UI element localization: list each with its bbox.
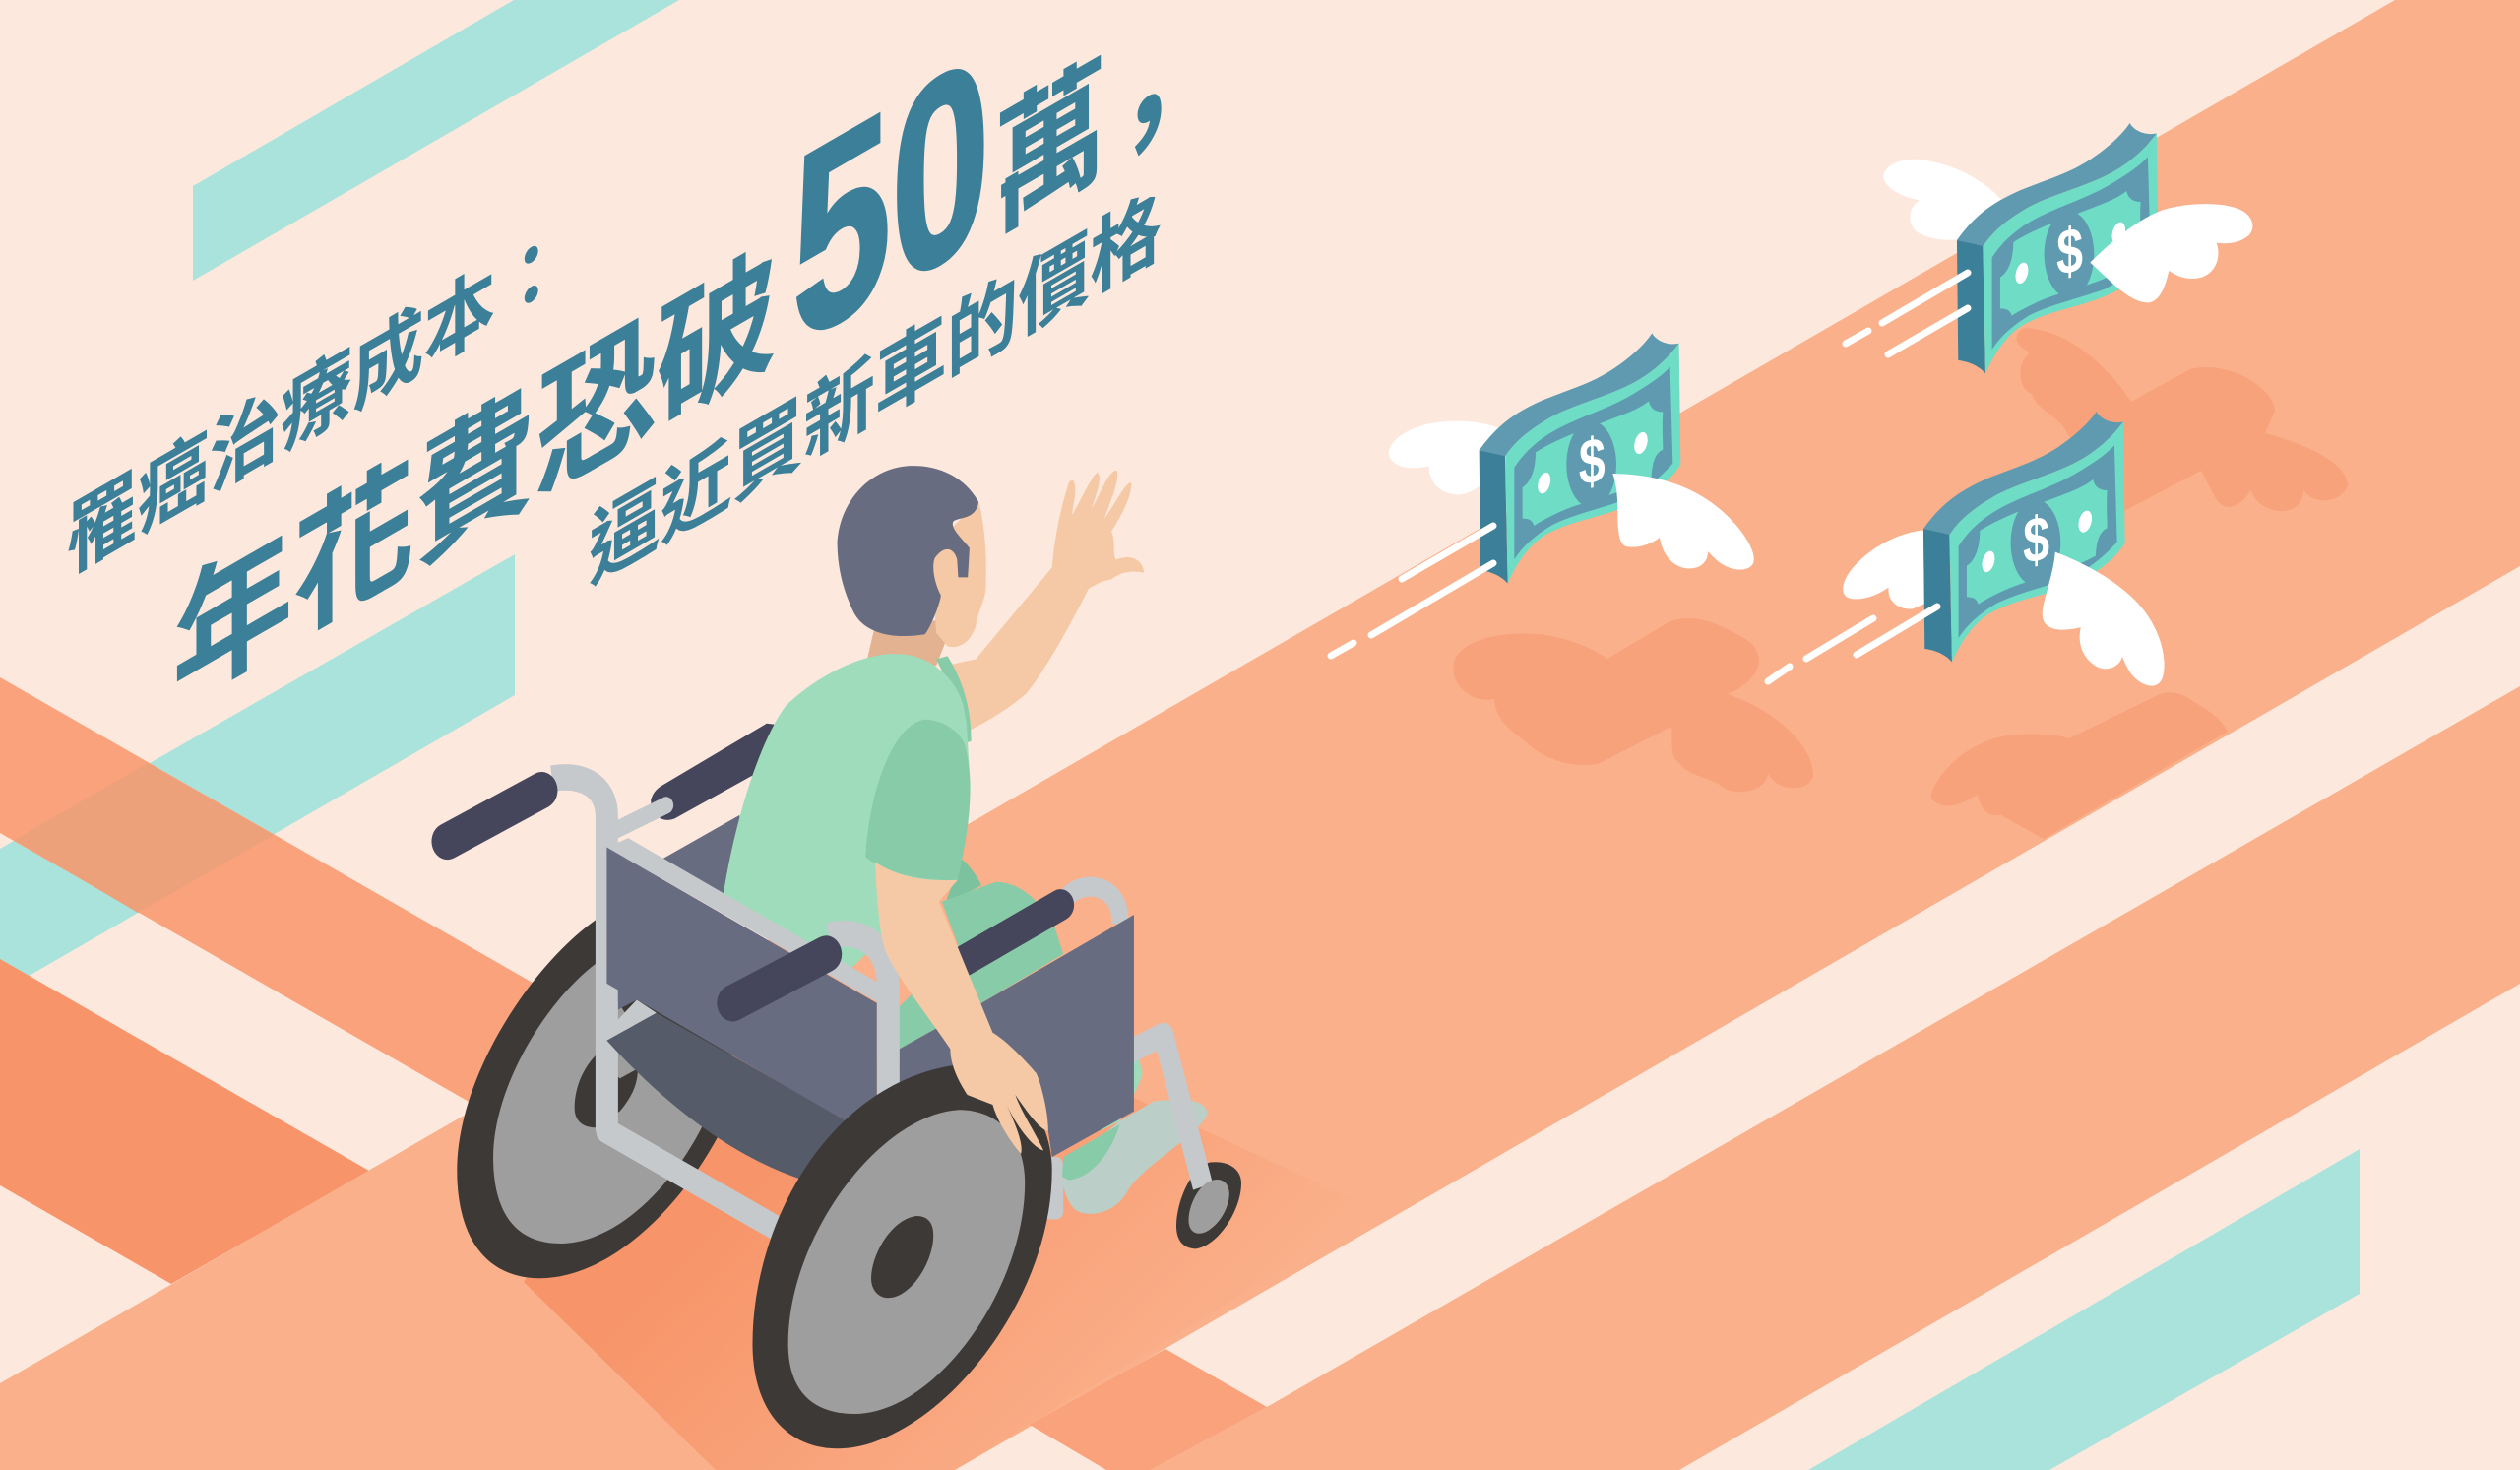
big number fifty: 50 (792, 0, 990, 403)
heading line two: 年花費恐破 (172, 190, 778, 742)
banknote (1923, 412, 2125, 662)
shirt (724, 654, 970, 974)
frame (552, 778, 900, 1233)
teal band middle (0, 554, 515, 992)
money bill one (1331, 333, 1754, 656)
lower road (1151, 686, 2520, 1470)
band overlap (15, 763, 274, 913)
legs (900, 882, 1063, 1049)
orange band two (0, 959, 369, 1284)
rear wheel (457, 902, 732, 1278)
banknote: $ (1579, 424, 1606, 499)
near armrest (732, 954, 826, 1003)
money bill three (1768, 412, 2165, 686)
left wing (1883, 160, 2001, 240)
right wing (2090, 204, 2252, 302)
side panel (900, 915, 1134, 1157)
right wing (2043, 552, 2165, 686)
sleeve (865, 720, 971, 880)
shirt shadow (945, 859, 981, 905)
raised arm (945, 471, 1144, 730)
speed lines (1846, 273, 1968, 354)
teal band top left (193, 0, 679, 281)
left wing (1389, 421, 1499, 494)
wing shadow middle (1453, 618, 1813, 792)
neck (867, 620, 946, 666)
front wheel (752, 1065, 1052, 1448)
seat underside (606, 1013, 851, 1180)
lower arm and hand (875, 863, 1048, 1154)
banknote (1480, 333, 1680, 584)
near push handle (448, 791, 541, 842)
heading line one: 罹癌治療成本： (66, 190, 567, 599)
money bill two (1846, 123, 2252, 373)
left wing (1843, 530, 1924, 608)
banknote: $ (2056, 215, 2083, 289)
right wing (1612, 474, 1754, 570)
hair (838, 466, 978, 636)
banknote: $ (2023, 503, 2049, 578)
heading line three: 逼近買新車的價格 (589, 158, 1162, 607)
seat back panel (606, 847, 877, 1124)
title text (66, 0, 1206, 742)
far push handle (617, 724, 778, 830)
footrest and caster (1043, 967, 1241, 1248)
seat back rear panel (662, 815, 744, 915)
speed lines (1768, 607, 1937, 681)
face (930, 502, 986, 647)
lower orange diamond (1030, 1349, 1267, 1470)
wheelchair floor shadow (524, 1034, 1378, 1470)
person in wheelchair (448, 466, 1241, 1448)
wing shadow upper (2017, 328, 2348, 512)
heading unit: 萬 (994, 1, 1106, 270)
speed lines (1331, 526, 1493, 656)
banknote (1957, 123, 2159, 373)
orange band one (0, 677, 613, 1107)
far armrest (965, 887, 1120, 961)
wing shadow lower (1931, 692, 2228, 839)
collar sleeve (936, 656, 972, 744)
teal band bottom right (1808, 1149, 2360, 1470)
